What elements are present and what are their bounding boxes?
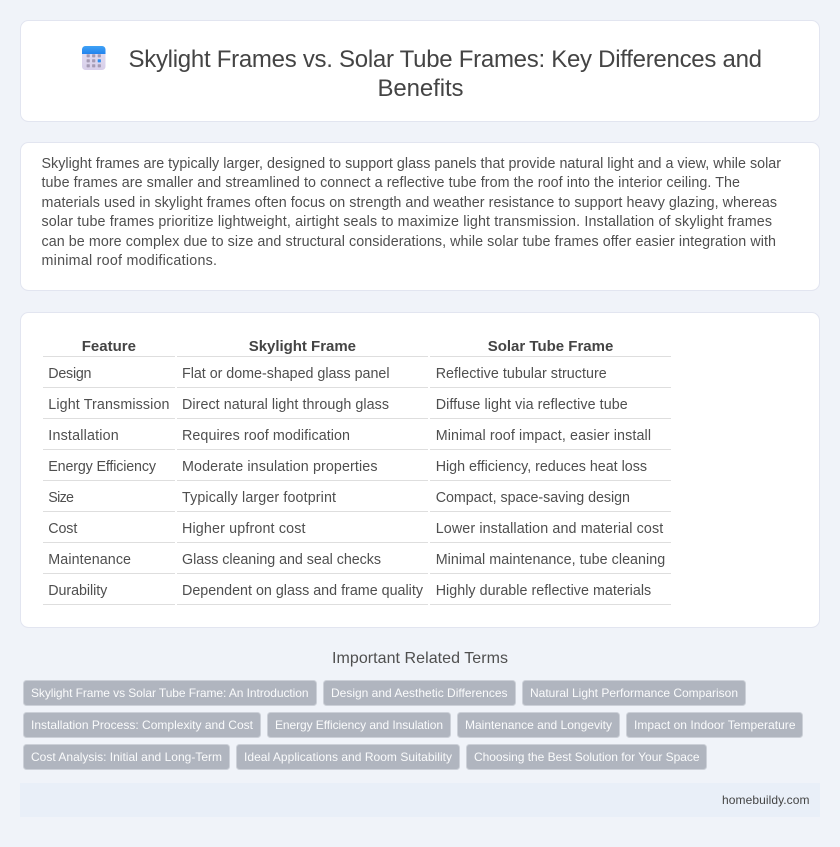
tag — [24, 744, 230, 770]
tag — [324, 680, 516, 706]
table header row — [82, 338, 613, 355]
row: maintenance — [48, 552, 665, 568]
text block: introduction paragraph: solar tube frames prioritize lightweight, airtight seals to maximize light transmission. Installation of skylight frames — [42, 214, 772, 230]
tag: Cost Analysis: Initial and Long-Term — [31, 750, 222, 764]
row: design: Design — [48, 366, 92, 382]
row: maintenance: Minimal maintenance, tube cleaning — [436, 552, 665, 568]
row: energy efficiency: Moderate insulation properties — [182, 459, 378, 475]
tag: Natural Light Performance Comparison — [530, 686, 738, 700]
text block: introduction paragraph: tube frames are smaller and streamlined to connect a reflective tube from the roof into the interior ceiling. The — [42, 175, 740, 191]
tag — [268, 712, 450, 738]
tag: Ideal Applications and Room Suitability — [244, 750, 452, 764]
tag: Design and Aesthetic Differences — [331, 686, 508, 700]
footer domain: homebuildy.com — [722, 793, 810, 807]
row: energy efficiency: High efficiency, reduces heat loss — [436, 459, 647, 475]
row: size — [48, 490, 630, 506]
table header row: Feature — [82, 338, 136, 355]
panel: introduction — [20, 142, 820, 290]
row: light transmission: Direct natural light through glass — [182, 397, 389, 413]
icon: calendar — [82, 46, 106, 70]
row: design — [48, 366, 607, 382]
footer bar — [20, 783, 820, 817]
tag — [236, 744, 460, 770]
text block: introduction paragraph: minimal roof modifications. — [42, 253, 217, 269]
row: light transmission: Diffuse light via reflective tube — [436, 397, 628, 413]
row: durability — [48, 583, 651, 599]
row: cost — [48, 521, 663, 537]
tag — [522, 680, 746, 706]
row: size: Size — [48, 490, 74, 506]
row: durability: Durability — [48, 583, 108, 599]
row: durability: Highly durable reflective materials — [436, 583, 651, 599]
text block: introduction paragraph: can be more complex due to size and structural considerations, while solar tube frames offer easier integration with — [42, 234, 776, 250]
row: installation: Installation — [48, 428, 119, 444]
row: size: Typically larger footprint — [182, 490, 336, 506]
tag: Energy Efficiency and Insulation — [275, 718, 443, 732]
tag — [458, 712, 620, 738]
row: installation: Requires roof modification — [182, 428, 350, 444]
text block: introduction paragraph: materials used in skylight frames often focus on strength and weather resistance to support heavy glazing, whereas — [42, 195, 777, 211]
tag — [626, 712, 802, 738]
row: installation: Minimal roof impact, easier install — [436, 428, 651, 444]
tag: Skylight Frame vs Solar Tube Frame: An Introduction — [31, 686, 308, 700]
row: maintenance: Glass cleaning and seal checks — [182, 552, 381, 568]
row: energy efficiency: Energy Efficiency — [48, 459, 157, 475]
panel: related term tags — [24, 680, 802, 770]
row: light transmission: Light Transmission — [48, 397, 170, 413]
panel: comparison table — [20, 312, 820, 628]
row: maintenance: Maintenance — [48, 552, 131, 568]
row: durability: Dependent on glass and frame quality — [182, 583, 424, 599]
row: size: Compact, space-saving design — [436, 490, 630, 506]
tag — [466, 744, 706, 770]
header panel — [20, 20, 820, 122]
row: cost: Cost — [48, 521, 77, 537]
text block: introduction paragraph: Skylight frames are typically larger, designed to support glass panels that provide natural light and a view, while solar — [42, 156, 781, 172]
tag: Choosing the Best Solution for Your Space — [474, 750, 700, 764]
tag — [24, 680, 316, 706]
table header row: Skylight Frame — [249, 338, 356, 355]
heading: important related terms: Important Related Terms — [332, 650, 508, 667]
tag: Installation Process: Complexity and Cost — [31, 718, 254, 732]
tag: Maintenance and Longevity — [465, 718, 612, 732]
title — [128, 46, 762, 102]
title: Skylight Frames vs. Solar Tube Frames: Key Differences and — [128, 46, 762, 73]
table header row: Solar Tube Frame — [488, 338, 613, 355]
tag: Impact on Indoor Temperature — [634, 718, 796, 732]
row: cost: Higher upfront cost — [182, 521, 306, 537]
row: light transmission — [48, 397, 628, 413]
row: design: Reflective tubular structure — [436, 366, 607, 382]
row: energy efficiency — [48, 459, 647, 475]
tag — [24, 712, 260, 738]
row: installation — [48, 428, 651, 444]
title: Benefits — [378, 75, 464, 102]
row: cost: Lower installation and material cost — [436, 521, 663, 537]
row: design: Flat or dome-shaped glass panel — [182, 366, 390, 382]
text block: introduction paragraph — [42, 156, 781, 269]
